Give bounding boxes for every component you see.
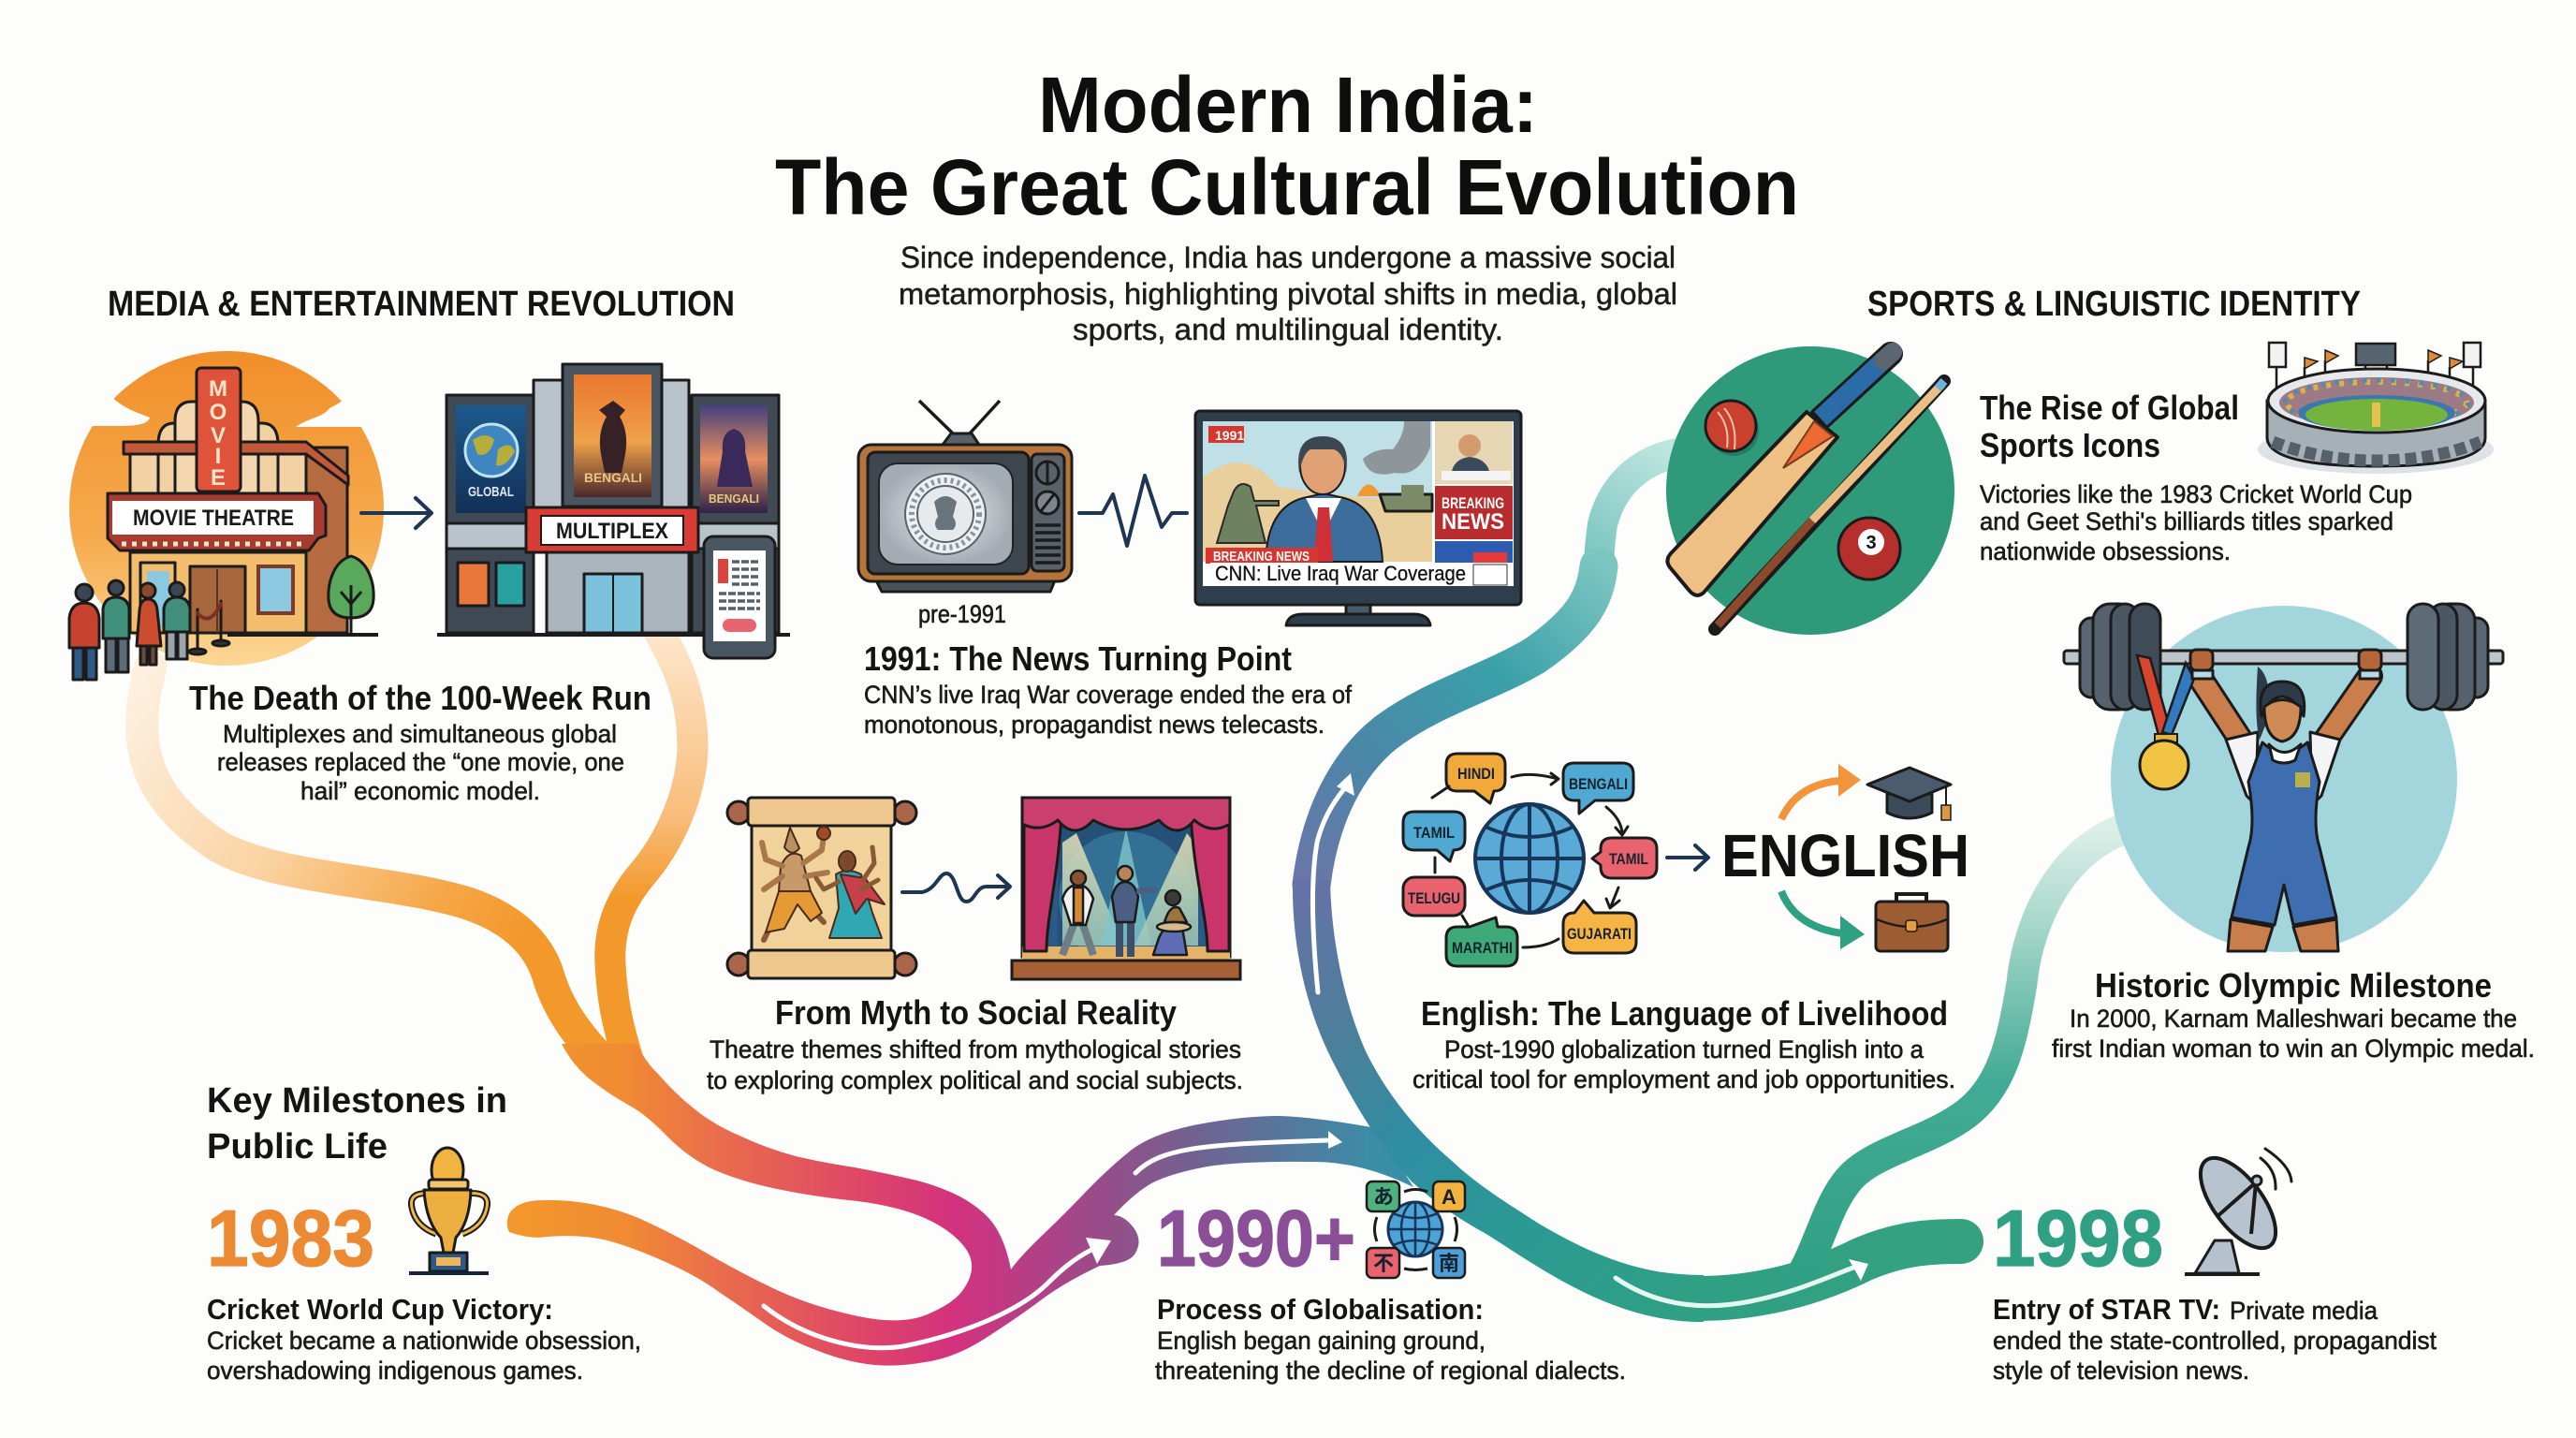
title — [775, 61, 1799, 231]
tree — [329, 556, 373, 635]
movie sign: V — [211, 423, 226, 448]
text: historic olympic milestone: In 2000, Karnam Malleshwari became the — [2070, 1005, 2517, 1033]
text: english language of livelihood: Post-1990 globalization turned English into a — [1444, 1035, 1925, 1064]
label: pre-1991: pre-1991 — [918, 600, 1006, 628]
text: myth to social reality — [707, 993, 1243, 1094]
news anchor — [1266, 436, 1383, 562]
icon: movie theatre — [56, 351, 402, 680]
tank — [1380, 494, 1432, 511]
text: 1991 news turning point: CNN’s live Iraq War coverage ended the era of — [864, 681, 1352, 709]
milestone year: 1990+: 1990+ — [1157, 1195, 1355, 1284]
language labels: MARATHI — [1452, 939, 1513, 957]
soldier — [1217, 484, 1279, 543]
text: process of globalisation — [1155, 1293, 1626, 1385]
poster: bengali: BENGALI — [584, 470, 642, 485]
controls — [1032, 454, 1064, 571]
breaking news box — [1435, 486, 1513, 539]
breaking news box: NEWS — [1442, 509, 1504, 535]
arrow: languages to english — [1667, 845, 1708, 870]
text: cricket world cup victory: Cricket World Cup Victory: — [207, 1293, 553, 1326]
ribbon flow arrows — [764, 773, 1868, 1348]
phone — [704, 536, 775, 658]
ribbon: multiplex fading arc — [610, 625, 693, 1063]
subtitle text block: Since independence, India has undergone a massive social — [900, 241, 1676, 274]
text: death of 100-week run: Multiplexes and simultaneous global — [223, 720, 617, 748]
movie sign: M — [209, 376, 227, 402]
text: rise of global sports icons: The Rise of Global — [1980, 389, 2239, 427]
text: rise of global sports icons: nationwide obsessions. — [1980, 537, 2231, 565]
curtains — [1022, 798, 1230, 951]
milestone year: 1998: 1998 — [1993, 1195, 2163, 1284]
icon: mythology scroll — [727, 798, 916, 978]
language labels: GUJARATI — [1567, 925, 1632, 943]
text: rise of global sports icons: Sports Icons — [1980, 426, 2160, 464]
ribbon: theatre fading arc — [142, 667, 608, 1067]
text: myth to social reality: From Myth to Social Reality — [775, 993, 1177, 1032]
billiard ball — [1838, 518, 1900, 580]
text: historic olympic milestone: Historic Olympic Milestone — [2095, 966, 2492, 1005]
icon: globe with scripts: A — [1442, 1185, 1456, 1209]
icon: modern television: 1991 — [1215, 428, 1244, 443]
ribbon: upper teal branch — [1599, 453, 1677, 571]
icon: cricket and billiards — [1666, 346, 1954, 635]
actors — [1062, 866, 1191, 957]
news ticker: BREAKING NEWS — [1213, 549, 1310, 565]
marquee — [108, 493, 326, 550]
text: death of 100-week run — [189, 679, 651, 805]
icon: globe with scripts: 不 — [1373, 1252, 1394, 1275]
text: 1991 news turning point: monotonous, propagandist news telecasts. — [864, 711, 1325, 739]
subtitle text block: sports, and multilingual identity. — [1073, 313, 1503, 346]
billiard ball: 3 — [1866, 533, 1877, 553]
arrow: english to jobs — [1781, 891, 1865, 949]
text: 1991 news turning point: 1991: The News Turning Point — [864, 639, 1292, 678]
ribbon: 1983 to 1990+ main band — [507, 1044, 1413, 1366]
emblem seal — [905, 474, 986, 554]
text: process of globalisation: English began gaining ground, — [1157, 1327, 1486, 1355]
ribbon: blue to teal sweep — [1293, 880, 1704, 1322]
text: 1991 news turning point — [864, 639, 1352, 739]
text: cricket world cup victory: overshadowing indigenous games. — [207, 1357, 583, 1385]
icon: globe with scripts — [1367, 1181, 1465, 1278]
medal — [2137, 655, 2194, 789]
icon: cricket stadium — [2258, 343, 2494, 474]
icon: globe with scripts: 南 — [1439, 1252, 1459, 1275]
text: entry of star tv: Private media — [2230, 1297, 2378, 1325]
arrow: english to education — [1781, 764, 1861, 819]
text: rise of global sports icons: Victories like the 1983 Cricket World Cup — [1980, 480, 2412, 508]
title: The Great Cultural Evolution — [775, 143, 1799, 231]
news ticker: CNN: Live Iraq War Coverage — [1215, 562, 1466, 585]
text: death of 100-week run: releases replaced the “one movie, one — [217, 748, 624, 776]
text: rise of global sports icons — [1980, 389, 2412, 565]
marquee: MOVIE THEATRE — [133, 506, 294, 531]
multiplex banner — [526, 507, 698, 552]
icon: globe with scripts: あ — [1373, 1185, 1394, 1209]
text: cricket world cup victory: Cricket became a nationwide obsession, — [207, 1327, 641, 1355]
text: entry of star tv — [1993, 1293, 2437, 1385]
text: rise of global sports icons: and Geet Sethi's billiards titles sparked — [1980, 507, 2393, 536]
milestone year: 1983: 1983 — [207, 1195, 374, 1284]
icon: satellite dish — [2185, 1146, 2291, 1274]
word: ENGLISH: ENGLISH — [1721, 822, 1969, 889]
cricket ball — [1705, 401, 1759, 456]
text: english language of livelihood: critical tool for employment and job opportunities. — [1412, 1065, 1955, 1093]
text: english language of livelihood — [1412, 994, 1955, 1093]
text: process of globalisation: threatening the decline of regional dialects. — [1155, 1357, 1626, 1385]
poster: global — [456, 405, 526, 513]
poster: global: GLOBAL — [468, 484, 514, 500]
icon: trophy — [409, 1148, 489, 1275]
cue stick — [1715, 381, 1944, 629]
movie sign: I — [215, 444, 221, 469]
icon: multiplex — [437, 364, 790, 658]
title: Modern India: — [1038, 61, 1538, 149]
icon: globe with language bubbles — [1403, 754, 1657, 966]
arrow: wavy transition — [902, 873, 1010, 902]
heading: key milestones: Public Life — [207, 1127, 388, 1167]
icon: theatre stage — [1012, 798, 1240, 979]
spotlights — [1062, 833, 1123, 946]
language labels — [1408, 765, 1648, 957]
people in queue — [69, 580, 190, 680]
flow ribbons — [142, 453, 2117, 1366]
barbell — [2064, 604, 2503, 710]
language labels: HINDI — [1457, 765, 1495, 783]
globe — [1475, 804, 1584, 913]
text: entry of star tv: Entry of STAR TV: — [1993, 1293, 2220, 1326]
language labels: BENGALI — [1569, 775, 1628, 793]
heading: key milestones — [207, 1081, 507, 1167]
text: english language of livelihood: English: The Language of Livelihood — [1421, 994, 1948, 1033]
multiplex banner: MULTIPLEX — [556, 519, 668, 544]
heading: key milestones: Key Milestones in — [207, 1081, 507, 1121]
breaking news box: BREAKING — [1442, 494, 1504, 512]
poster: regional: BENGALI — [709, 492, 759, 506]
smoke and fire — [1363, 421, 1430, 475]
language labels: TAMIL — [1609, 850, 1648, 868]
bat — [1667, 352, 1893, 595]
movie sign: E — [211, 465, 226, 491]
text: death of 100-week run: The Death of the 100-Week Run — [189, 679, 651, 717]
movie sign — [197, 368, 241, 492]
icon: old television — [858, 401, 1072, 592]
dancing figures — [762, 827, 885, 940]
icon: briefcase — [1876, 894, 1948, 951]
arms — [2199, 676, 2370, 749]
rope stanchions — [189, 601, 229, 654]
text: entry of star tv: style of television news. — [1993, 1357, 2249, 1385]
text: historic olympic milestone: first Indian woman to win an Olympic medal. — [2052, 1034, 2535, 1063]
text: process of globalisation: Process of Globalisation: — [1157, 1293, 1484, 1326]
text: myth to social reality: Theatre themes shifted from mythological stories — [710, 1035, 1241, 1064]
icon: modern television — [1195, 411, 1521, 625]
text: death of 100-week run: hail” economic model. — [300, 777, 540, 805]
text: myth to social reality: to exploring complex political and social subjects. — [707, 1066, 1243, 1094]
subtitle text block — [899, 241, 1677, 346]
language bubbles — [1403, 754, 1657, 966]
reporter inset — [1435, 421, 1513, 484]
subtitle text block: metamorphosis, highlighting pivotal shifts in media, global — [899, 277, 1677, 311]
bubble connectors — [1432, 773, 1628, 947]
language labels: TAMIL — [1413, 824, 1455, 842]
arrow: signal wave — [1079, 476, 1187, 546]
year tag — [1208, 426, 1244, 443]
icon: weightlifter with medal — [2064, 604, 2503, 952]
section heading: media: MEDIA & ENTERTAINMENT REVOLUTION — [108, 285, 735, 324]
poster: regional — [700, 405, 768, 513]
language labels: TELUGU — [1408, 889, 1460, 907]
arrow: theatre to multiplex — [361, 498, 432, 528]
poster: bengali — [574, 374, 651, 497]
athlete — [2190, 650, 2381, 951]
text: historic olympic milestone — [2052, 966, 2535, 1063]
text: entry of star tv: ended the state-controlled, propagandist — [1993, 1327, 2437, 1355]
floodlights and flags — [2269, 343, 2481, 389]
movie sign: O — [210, 400, 227, 425]
news ticker — [1206, 548, 1507, 586]
ribbon: teal end at 1998 — [1698, 1241, 1961, 1299]
ribbon: teal to blue descent — [1311, 566, 1599, 885]
icon: graduation cap — [1867, 768, 1951, 820]
text: cricket world cup victory — [207, 1293, 641, 1385]
section heading: sports: SPORTS & LINGUISTIC IDENTITY — [1867, 285, 2361, 324]
ribbon: fork up to Olympic circle — [1796, 831, 2117, 1284]
